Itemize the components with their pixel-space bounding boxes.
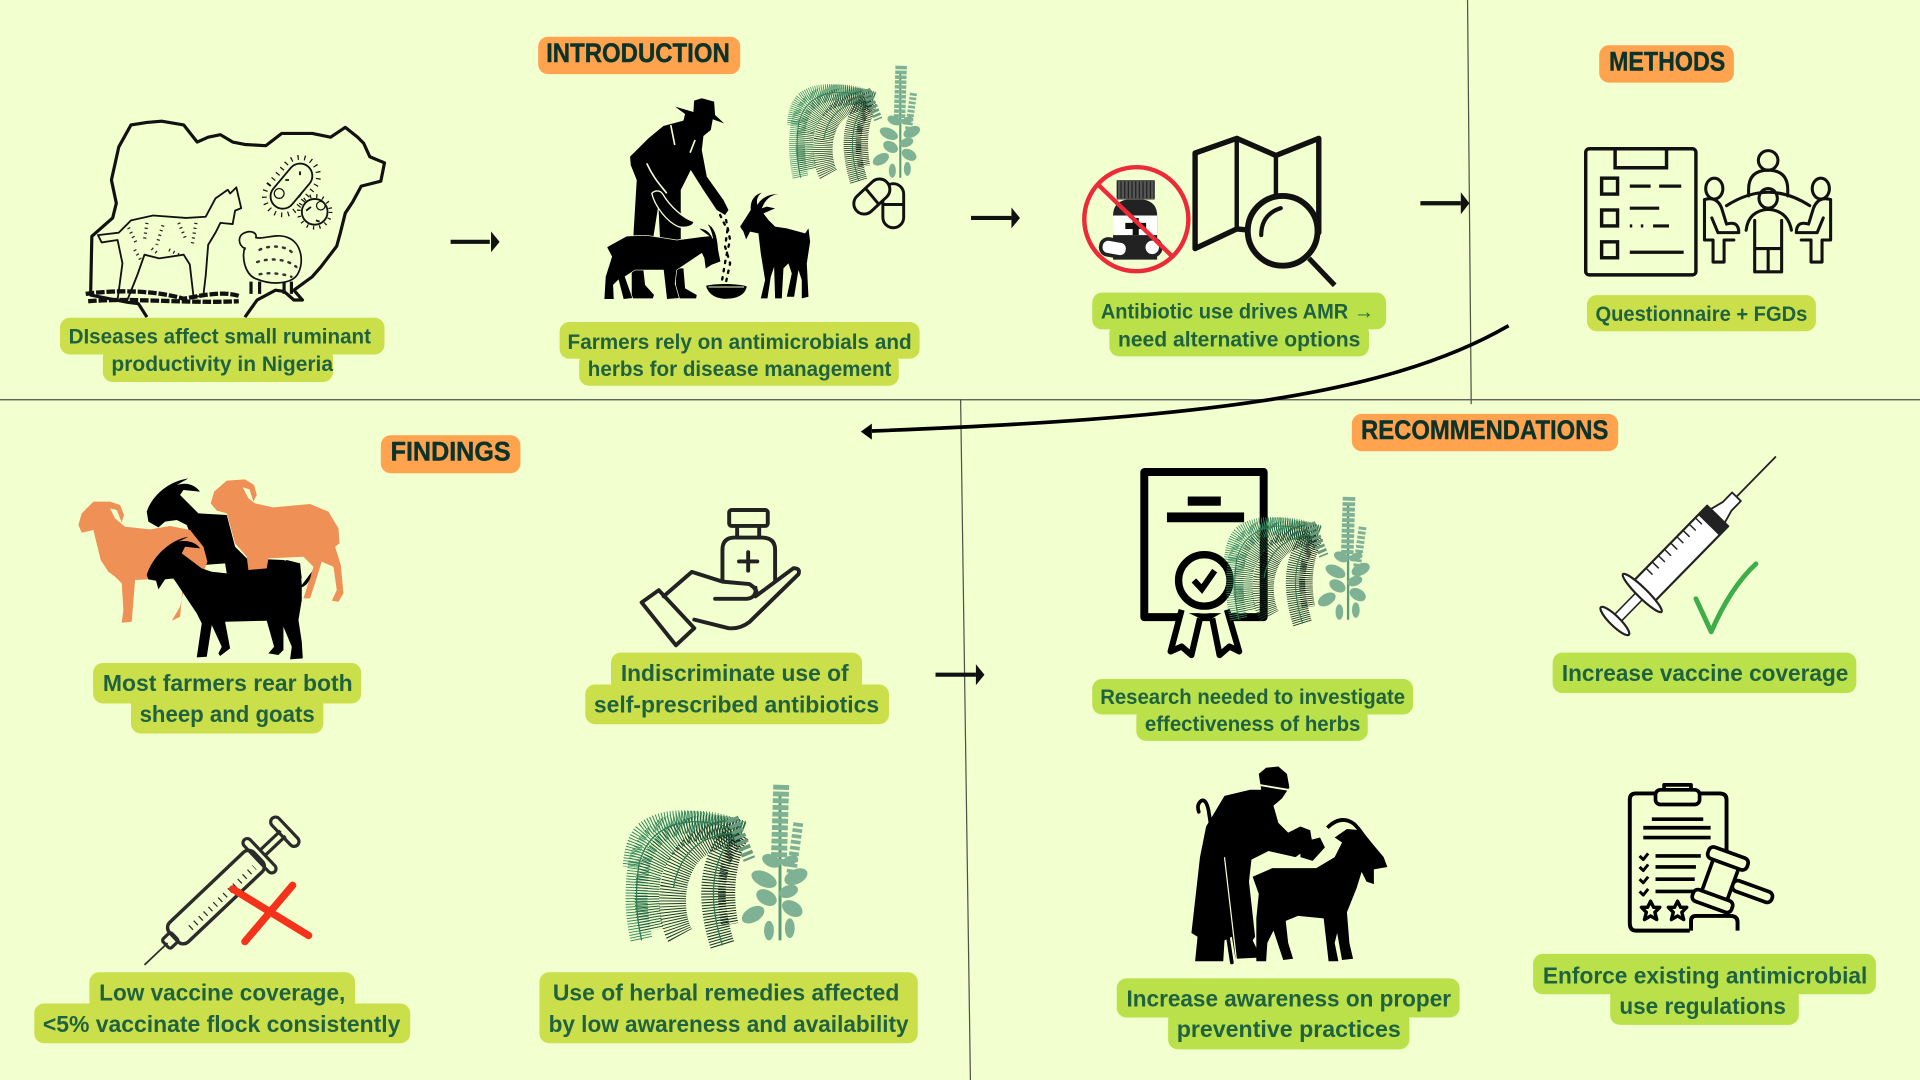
icon: hand holding antibiotic bottle — [642, 510, 799, 645]
heading: introduction: INTRODUCTION — [546, 38, 730, 68]
caption: farmers: herbs for disease management — [588, 357, 891, 381]
caption: vaccine coverage: Low vaccine coverage, — [99, 979, 345, 1005]
caption: enforce: use regulations — [1619, 993, 1786, 1019]
icon: no antibiotics — [1084, 167, 1188, 271]
caption: antibiotic use — [1092, 293, 1386, 356]
caption: antibiotics: self-prescribed antibiotics — [594, 692, 879, 718]
icon: certificate with herbs — [1144, 472, 1372, 655]
panel: findings — [34, 435, 984, 1043]
falling feed — [720, 215, 730, 282]
man — [1191, 767, 1313, 961]
icon: map and magnifier — [1195, 138, 1335, 285]
caption: research: Research needed to investigate — [1100, 686, 1405, 709]
caption: diseases — [60, 318, 384, 382]
illustration: Nigeria map with goat, sheep and bacteria — [86, 121, 384, 317]
caption: vaccine coverage — [34, 972, 410, 1043]
back goat — [147, 478, 302, 578]
caption: farmers — [560, 322, 920, 386]
caption: increase vaccine — [1553, 653, 1856, 693]
farmer — [630, 98, 728, 240]
caption: questionnaire: Questionnaire + FGDs — [1596, 302, 1807, 326]
shepherd staff — [1198, 800, 1232, 962]
caption: herbal remedies: Use of herbal remedies affected — [553, 979, 899, 1005]
right participant — [1796, 178, 1831, 262]
caption: diseases: DIseases affect small ruminant — [69, 324, 371, 348]
goat — [1253, 829, 1387, 961]
icon: herbs — [793, 66, 922, 181]
arrow — [1420, 192, 1469, 214]
icon: questionnaire clipboard — [1586, 149, 1696, 275]
panel: introduction — [60, 37, 1469, 386]
heading: findings: FINDINGS — [391, 436, 511, 466]
caption: herbal remedies — [539, 972, 918, 1043]
table — [1727, 192, 1810, 206]
caption: enforce: Enforce existing antimicrobial — [1543, 962, 1867, 988]
bottle in hand — [1300, 838, 1325, 861]
caption: questionnaire — [1587, 295, 1816, 331]
caption: awareness — [1117, 978, 1460, 1049]
sketch sheep — [239, 232, 301, 294]
moderator — [1758, 151, 1778, 170]
caption: awareness: Increase awareness on proper — [1127, 986, 1451, 1012]
caption: rear both: sheep and goats — [140, 701, 315, 727]
heading: methods: METHODS — [1609, 46, 1725, 76]
arrow — [971, 208, 1020, 228]
icon: capsules — [850, 175, 904, 228]
caption: rear both: Most farmers rear both — [103, 670, 353, 696]
caption: diseases: productivity in Nigeria — [111, 352, 334, 376]
left sheep — [78, 502, 207, 623]
farmer boots — [632, 268, 697, 298]
icon: clipboard with gavel — [1630, 785, 1782, 931]
heading: recommendations: RECOMMENDATIONS — [1361, 415, 1608, 445]
caption: vaccine coverage: <5% vaccinate flock consistently — [43, 1011, 400, 1037]
caption: farmers: Farmers rely on antimicrobials and — [568, 330, 912, 354]
sketch goat — [86, 187, 241, 302]
feed pan — [652, 191, 694, 227]
right goat — [740, 193, 810, 298]
arrow — [936, 664, 984, 685]
panel: methods — [1586, 45, 1831, 331]
cap band — [1259, 785, 1288, 790]
front participant — [1746, 189, 1791, 272]
bacteria — [257, 150, 331, 228]
map outline — [91, 121, 384, 317]
icon: focus group discussion — [1704, 151, 1831, 272]
bowl — [706, 284, 747, 299]
overall straps — [647, 125, 695, 193]
caption: enforce — [1533, 954, 1876, 1025]
left participant — [1704, 178, 1739, 262]
icon: sheep and goats flock — [78, 478, 343, 659]
caption: antibiotics: Indiscriminate use of — [621, 660, 849, 686]
panel: recommendations — [1092, 414, 1876, 1049]
caption: antibiotics — [585, 653, 889, 724]
caption: herbal remedies: by low awareness and availability — [549, 1011, 909, 1037]
arrow — [451, 231, 500, 252]
caption: research — [1092, 679, 1413, 741]
illustration: farmer feeding goats — [603, 98, 810, 299]
icon: farmer treating goat — [1191, 767, 1387, 962]
front goat — [147, 537, 312, 659]
icon: syringe crossed out — [129, 812, 309, 981]
caption: antibiotic use: need alternative options — [1118, 328, 1360, 352]
caption: research: effectiveness of herbs — [1145, 713, 1360, 736]
caption: antibiotic use: Antibiotic use drives AMR → — [1101, 299, 1374, 323]
left goat — [603, 223, 721, 299]
caption: awareness: preventive practices — [1177, 1016, 1401, 1042]
icon: herbal plants — [631, 785, 810, 945]
icon: syringe with check mark — [1592, 438, 1795, 643]
right sheep — [211, 479, 343, 602]
arrow: methods to findings — [861, 326, 1509, 440]
caption: rear both — [93, 663, 361, 733]
caption: increase vaccine: Increase vaccine coverage — [1562, 660, 1848, 686]
